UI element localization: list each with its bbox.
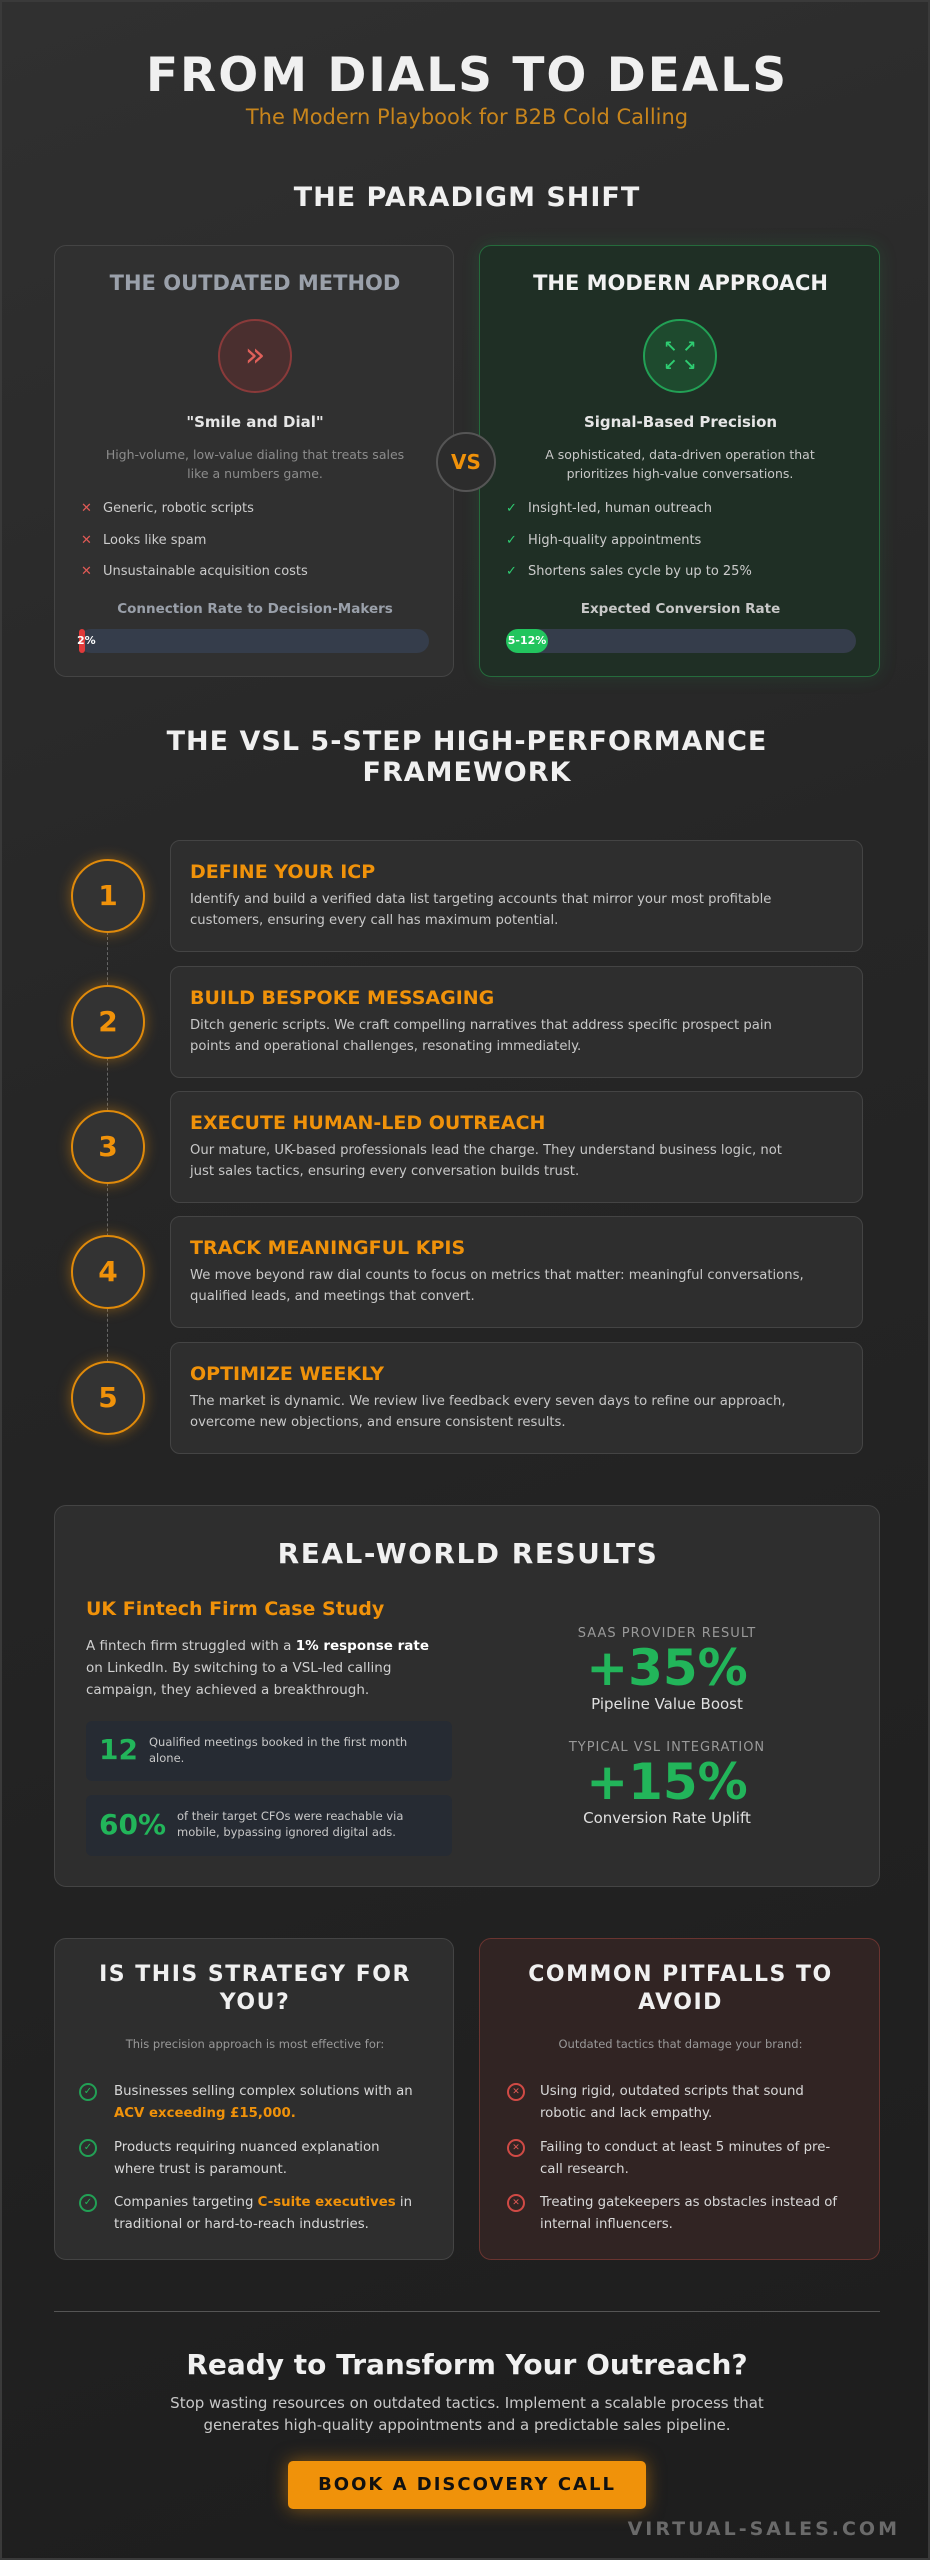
list: strategy items: ✓ <box>84 2142 92 2153</box>
icon: number 3: 3 <box>98 1130 118 1163</box>
icon: expand arrows: ↖ ↗ <box>664 337 696 356</box>
card: KPIs <box>170 1216 863 1328</box>
stat: +35%: +35% <box>586 1639 748 1697</box>
text: modern desc: A sophisticated, data-driven operation that prioritizes high-value conversations. <box>545 447 815 481</box>
stat: +15%: TYPICAL VSL INTEGRATION <box>569 1740 765 1755</box>
connector line <box>107 932 108 1372</box>
list: pitfalls items: ✕ <box>512 2198 520 2208</box>
list: pitfalls items: Failing to conduct at least 5 minutes of pre- <box>540 2140 830 2155</box>
text: outdated desc: High-volume, low-value dialing that treats sales like a numbers game. <box>106 447 404 481</box>
list: strategy items: where trust is paramount. <box>114 2162 287 2177</box>
stat: +15%: Conversion Rate Uplift <box>583 1809 751 1827</box>
card: messaging: points and operational challenges, resonating immediately. <box>190 1039 581 1054</box>
heading: strategy <box>99 1962 411 2015</box>
icon: number 4: 4 <box>98 1255 118 1288</box>
list: strategy items: Companies targeting C-suite executives in <box>114 2195 412 2210</box>
stat: 60% CFOs: 60% <box>99 1808 166 1841</box>
list: modern bullets <box>506 501 752 579</box>
panel: modern approach <box>479 245 880 677</box>
bar: 2% <box>79 629 429 653</box>
step 5 <box>63 1342 863 1454</box>
icon: number 3 <box>71 1110 145 1184</box>
list: outdated bullets: ✕ <box>81 533 92 548</box>
list: outdated bullets: ✕ <box>81 501 92 516</box>
list: pitfalls items: Treating gatekeepers as obstacles instead of <box>540 2195 837 2210</box>
card: messaging <box>170 966 863 1078</box>
list: pitfalls items: ✕ <box>512 2143 520 2153</box>
subtitle: The Modern Playbook for B2B Cold Calling <box>246 105 688 129</box>
list: strategy items: traditional or hard-to-reach industries. <box>114 2217 369 2232</box>
list: strategy items: Businesses selling complex solutions with an <box>114 2084 413 2099</box>
label: connection rate: Connection Rate to Decision-Makers <box>117 601 393 617</box>
list: strategy items: Products requiring nuanced explanation <box>114 2140 380 2155</box>
card: KPIs: We move beyond raw dial counts to focus on metrics that matter: meaningful conversations, <box>190 1268 804 1283</box>
label: signal-based: Signal-Based Precision <box>584 413 777 431</box>
heading: CTA: Ready to Transform Your Outreach? <box>186 2348 748 2381</box>
text: strategy sub: This precision approach is most effective for: <box>126 2037 384 2051</box>
card: outreach: EXECUTE HUMAN-LED OUTREACH <box>190 1112 545 1134</box>
panel: is this strategy for you <box>54 1938 454 2260</box>
bar: 2%: 2% <box>77 634 96 647</box>
list: pitfalls items: Using rigid, outdated scripts that sound <box>540 2084 804 2099</box>
card: outreach: Our mature, UK-based professionals lead the charge. They understand business logic, not <box>190 1143 782 1158</box>
icon: double chevron <box>218 319 292 393</box>
label: conversion rate: Expected Conversion Rate <box>581 601 780 617</box>
list: modern bullets: Insight-led, human outreach <box>528 501 712 516</box>
panel: real-world results <box>54 1505 880 1887</box>
heading: framework: THE VSL 5-STEP HIGH-PERFORMANCE <box>167 726 767 757</box>
list: strategy items: ✓ <box>84 2086 92 2097</box>
stat: 60% CFOs <box>86 1795 452 1856</box>
heading: framework <box>166 726 767 788</box>
badge: VS <box>436 432 496 492</box>
panel: outdated method <box>54 245 454 677</box>
stat: 12 meetings: 12 <box>99 1733 138 1766</box>
card: define ICP: DEFINE YOUR ICP <box>190 861 375 883</box>
heading: paradigm shift: THE PARADIGM SHIFT <box>294 182 640 213</box>
list: pitfalls items: ✕ <box>512 2087 520 2097</box>
step 3 <box>63 1091 863 1203</box>
card: define ICP: Identify and build a verified data list targeting accounts that mirror your most profitable <box>190 892 771 907</box>
card: define ICP <box>170 840 863 952</box>
card: optimize: OPTIMIZE WEEKLY <box>190 1363 384 1385</box>
bar: 5-12%: 5-12% <box>508 634 546 647</box>
list: pitfalls items <box>507 2083 838 2232</box>
icon: number 1 <box>71 859 145 933</box>
stat: 60% CFOs: of their target CFOs were reachable via mobile, bypassing ignored digital ads. <box>177 1809 403 1839</box>
button: book call <box>288 2461 646 2509</box>
stat: 12 meetings <box>86 1721 452 1781</box>
step 4 <box>63 1216 863 1328</box>
heading: pitfalls: COMMON PITFALLS TO <box>528 1962 833 1987</box>
card: KPIs: TRACK MEANINGFUL KPIS <box>190 1237 465 1259</box>
list: strategy items: ACV exceeding £15,000. <box>114 2106 296 2121</box>
heading: framework: FRAMEWORK <box>363 757 571 788</box>
list: pitfalls items: robotic and lack empathy. <box>540 2106 712 2121</box>
list: outdated bullets: Looks like spam <box>103 533 206 548</box>
list: strategy items: ✓ <box>84 2197 92 2208</box>
text: CTA: Stop wasting resources on outdated tactics. Implement a scalable process that generates high-quality appointments and a predictable sales pipeline. <box>170 2394 764 2434</box>
icon: number 2: 2 <box>98 1005 118 1038</box>
heading: pitfalls: AVOID <box>638 1990 723 2015</box>
card: messaging: Ditch generic scripts. We craft compelling narratives that address specific prospect pain <box>190 1018 772 1033</box>
list: modern bullets: ✓ <box>506 501 517 516</box>
list: outdated bullets <box>81 501 308 579</box>
stat: +35% <box>578 1626 756 1713</box>
card: define ICP: customers, ensuring every call has maximum potential. <box>190 913 558 928</box>
heading: results: REAL-WORLD RESULTS <box>278 1537 658 1570</box>
stat: +35%: SAAS PROVIDER RESULT <box>578 1626 756 1641</box>
list: outdated bullets: Unsustainable acquisition costs <box>103 564 308 579</box>
list: strategy items <box>79 2083 413 2232</box>
icon: number 2 <box>71 985 145 1059</box>
bar: 5-12% <box>506 629 856 653</box>
list: modern bullets: High-quality appointments <box>528 533 701 548</box>
card: optimize: overcome new objections, and ensure consistent results. <box>190 1415 566 1430</box>
text: case study <box>86 1638 429 1698</box>
list: pitfalls items: call research. <box>540 2162 629 2177</box>
stat: 12 meetings: Qualified meetings booked in the first month alone. <box>149 1735 407 1765</box>
stat: +15% <box>568 1740 765 1827</box>
badge: VS: VS <box>451 450 481 474</box>
subheading: case study: UK Fintech Firm Case Study <box>86 1598 384 1620</box>
heading: strategy: YOU? <box>220 1990 290 2015</box>
label: smile and dial: "Smile and Dial" <box>186 413 324 431</box>
card: outreach <box>170 1091 863 1203</box>
heading: strategy: IS THIS STRATEGY FOR <box>99 1962 411 1987</box>
step 2 <box>63 966 863 1078</box>
card: messaging: BUILD BESPOKE MESSAGING <box>190 987 494 1009</box>
text: case study: on LinkedIn. By switching to a VSL-led calling <box>86 1660 391 1676</box>
icon: expand arrows <box>643 319 717 393</box>
list: modern bullets: ✓ <box>506 533 517 548</box>
card: optimize: The market is dynamic. We review live feedback every seven days to refine our approach, <box>190 1394 786 1409</box>
title: FROM DIALS TO DEALS <box>146 48 788 103</box>
icon: number 1: 1 <box>98 879 118 912</box>
icon: number 5: 5 <box>98 1381 118 1414</box>
list: pitfalls items: internal influencers. <box>540 2217 673 2232</box>
icon: expand arrows: ↙ ↘ <box>664 355 696 374</box>
text: pitfalls sub: Outdated tactics that damage your brand: <box>558 2037 802 2051</box>
text: case study: A fintech firm struggled with a 1% response rate <box>86 1638 429 1654</box>
text: case study: campaign, they achieved a breakthrough. <box>86 1682 369 1698</box>
step 1 <box>63 840 863 952</box>
icon: double chevron: » <box>245 335 265 375</box>
panel: common pitfalls <box>479 1938 880 2260</box>
heading: outdated: THE OUTDATED METHOD <box>110 271 400 295</box>
stat: +15%: +15% <box>586 1753 748 1811</box>
list: outdated bullets: ✕ <box>81 564 92 579</box>
footer: brand: VIRTUAL-SALES.COM <box>628 2518 900 2540</box>
heading: modern: THE MODERN APPROACH <box>533 271 828 295</box>
card: KPIs: qualified leads, and meetings that convert. <box>190 1289 475 1304</box>
stat: +35%: Pipeline Value Boost <box>591 1695 743 1713</box>
list: outdated bullets: Generic, robotic scripts <box>103 501 254 516</box>
card: outreach: just sales tactics, ensuring every conversation builds trust. <box>190 1164 579 1179</box>
card: optimize <box>170 1342 863 1454</box>
list: modern bullets: ✓ <box>506 564 517 579</box>
icon: number 5 <box>71 1361 145 1435</box>
list: modern bullets: Shortens sales cycle by up to 25% <box>528 564 752 579</box>
heading: pitfalls <box>528 1962 833 2015</box>
icon: number 4 <box>71 1235 145 1309</box>
button: book call: BOOK A DISCOVERY CALL <box>318 2474 616 2495</box>
